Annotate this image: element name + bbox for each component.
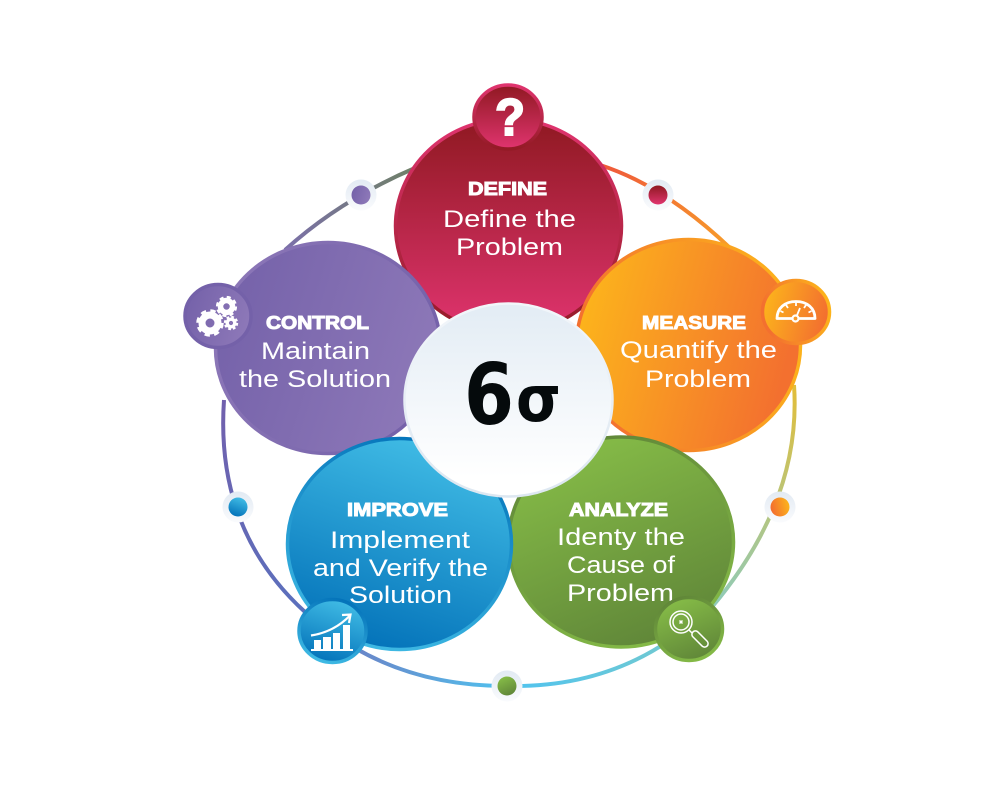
panel: improve: IMPROVE bbox=[347, 499, 448, 520]
icon: speedometer bbox=[762, 280, 830, 344]
panel: control: the Solution bbox=[239, 366, 391, 393]
panel: define: DEFINE bbox=[468, 178, 547, 199]
panel: control bbox=[216, 242, 440, 454]
center circle: six sigma: 6 bbox=[464, 346, 514, 445]
panel: define: Define the bbox=[443, 206, 576, 233]
panel: measure: MEASURE bbox=[642, 312, 746, 333]
icon: magnifying glass bbox=[656, 598, 722, 660]
panel: analyze: Identy the bbox=[557, 524, 685, 551]
center circle: six sigma bbox=[404, 304, 612, 496]
panel: measure bbox=[576, 240, 800, 450]
panel: define bbox=[396, 119, 622, 333]
ring marker dots bbox=[222, 180, 796, 702]
panel: control: CONTROL bbox=[266, 312, 369, 333]
icon: gears bbox=[185, 284, 251, 348]
panel: control: Maintain bbox=[261, 338, 370, 365]
panel: improve: and Verify the bbox=[313, 555, 488, 582]
panel: analyze: ANALYZE bbox=[569, 499, 668, 520]
panel: measure: Problem bbox=[645, 366, 751, 393]
center circle: six sigma: σ bbox=[516, 363, 561, 437]
panel: improve: Solution bbox=[349, 582, 452, 609]
panel: analyze bbox=[508, 437, 734, 647]
panel: measure: Quantify the bbox=[620, 337, 777, 364]
panel: analyze: Problem bbox=[567, 580, 674, 607]
icon: growth chart bbox=[299, 600, 366, 662]
panel: improve: Implement bbox=[330, 527, 470, 554]
icon: question mark: ? bbox=[495, 89, 525, 147]
icon: question mark bbox=[474, 85, 542, 149]
panel: analyze: Cause of bbox=[567, 552, 675, 579]
panel: define: Problem bbox=[456, 234, 563, 261]
outer ring bbox=[223, 165, 795, 686]
panel: improve bbox=[288, 438, 512, 650]
